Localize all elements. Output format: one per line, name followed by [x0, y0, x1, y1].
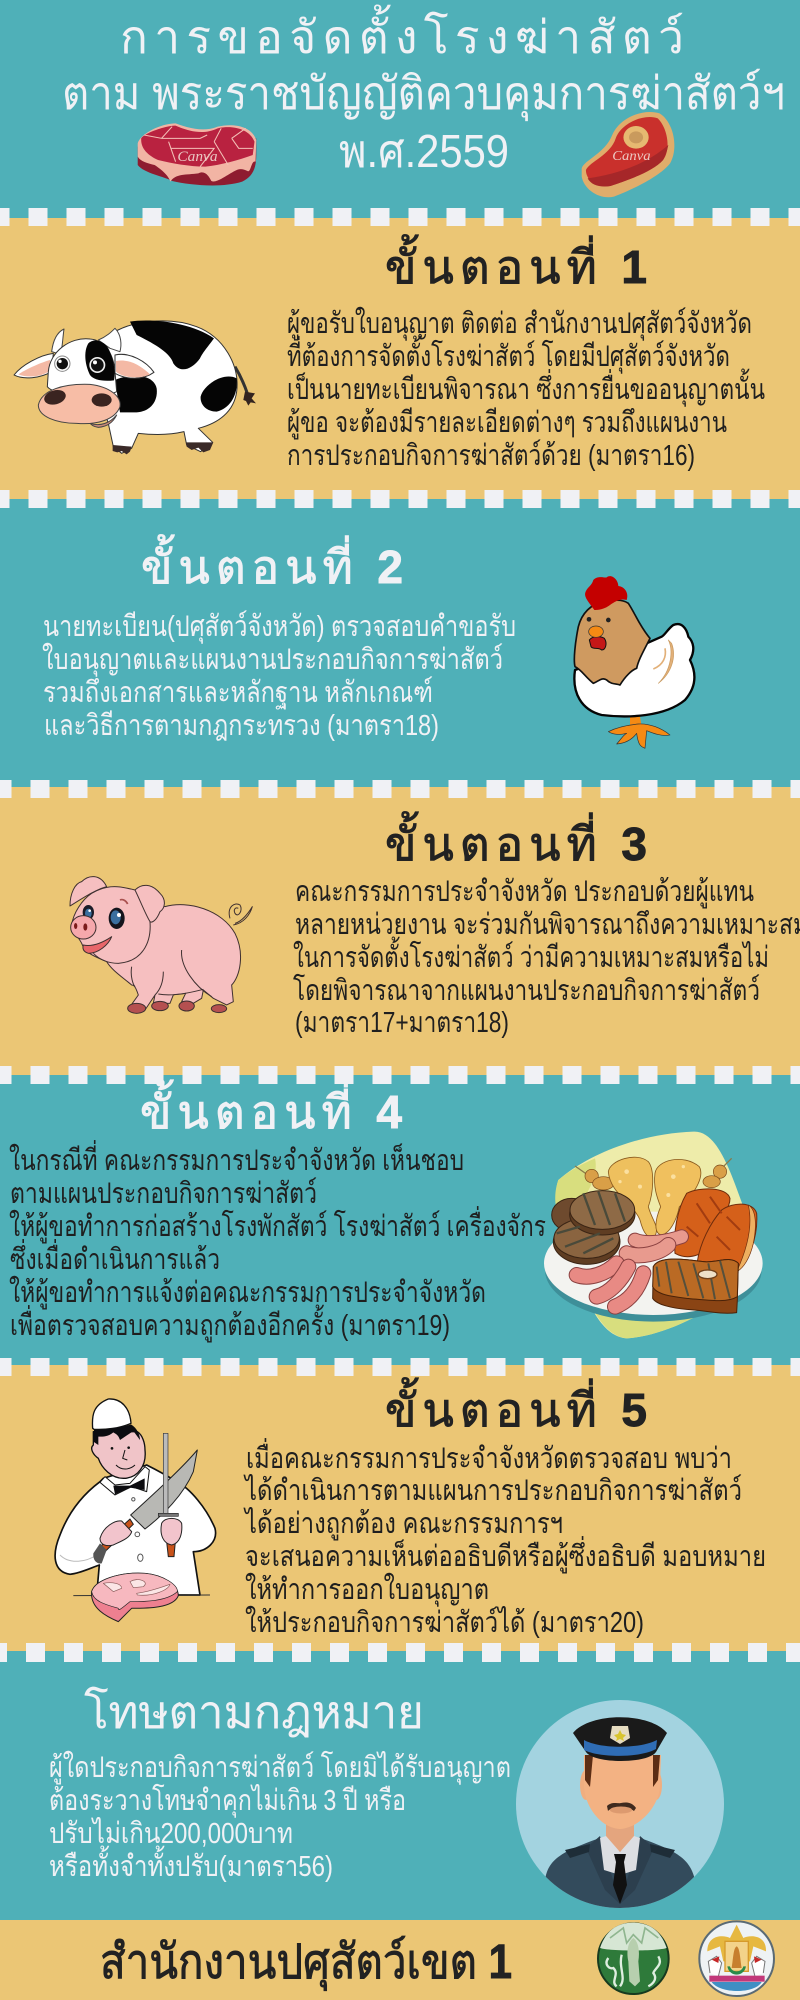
- footer title: สำนักงานปศุสัตว์เขต 1: [100, 1936, 512, 1991]
- step 2 text: [42, 610, 516, 742]
- icon: police officer: [516, 1700, 724, 1908]
- step 5 text: ให้ประกอบกิจการฆ่าสัตว์ได้ (มาตรา20): [245, 1605, 644, 1639]
- step 5 text: ได้อย่างถูกต้อง คณะกรรมการฯ: [243, 1506, 563, 1541]
- panel: step 2 background: [0, 499, 800, 787]
- step 3 text: [293, 876, 800, 1039]
- icon: butcher: [55, 1399, 216, 1622]
- penalty text: ปรับไม่เกิน200,000บาท: [49, 1816, 293, 1850]
- step 1 heading: ขั้นตอนที่ 1: [385, 234, 647, 293]
- step 2 text: ใบอนุญาตและแผนงานประกอบกิจการฆ่าสัตว์: [42, 642, 503, 677]
- penalty text: ผู้ใดประกอบกิจการฆ่าสัตว์ โดยมิได้รับอนุญาต: [49, 1750, 511, 1785]
- step 4 text: ให้ผู้ขอทำการก่อสร้างโรงพักสัตว์ โรงฆ่าสัตว์ เครื่องจักร: [9, 1206, 546, 1244]
- step 4 text: เพื่อตรวจสอบความถูกต้องอีกครั้ง (มาตรา19): [10, 1304, 450, 1343]
- penalty heading: โทษตามกฎหมาย: [84, 1686, 424, 1738]
- penalty text: [49, 1750, 511, 1883]
- step 2 text: นายทะเบียน(ปศุสัตว์จังหวัด) ตรวจสอบคำขอรับ: [43, 610, 516, 644]
- icon: grilled steak: [582, 112, 674, 197]
- step 1 text: การประกอบกิจการฆ่าสัตว์ด้วย (มาตรา16): [287, 439, 695, 472]
- icon: raw steak: [138, 123, 256, 185]
- step 1 text: [287, 306, 765, 472]
- logo: royal emblem: [699, 1921, 774, 1996]
- step 5 text: [243, 1438, 766, 1639]
- step 4 text: ตามแผนประกอบกิจการฆ่าสัตว์: [10, 1177, 317, 1210]
- panel: step 1 background: [0, 218, 800, 499]
- step 4 text: ในกรณีที่ คณะกรรมการประจำจังหวัด เห็นชอบ: [9, 1140, 464, 1177]
- icon: plate of grilled meat: [544, 1132, 763, 1338]
- step 4 text: ซึ่งเมื่อดำเนินการแล้ว: [10, 1239, 220, 1276]
- panel: title background: [0, 0, 800, 218]
- icon: chicken: [574, 576, 694, 748]
- step 5 text: ให้ทำการออกใบอนุญาต: [245, 1572, 489, 1607]
- logo: green emblem: [598, 1923, 669, 1994]
- panel: footer background: [0, 1920, 800, 2000]
- step 4 text: [9, 1140, 546, 1343]
- panel: step 5 background: [0, 1365, 800, 1651]
- panel: penalty background: [0, 1651, 800, 1920]
- penalty text: หรือทั้งจำทั้งปรับ(มาตรา56): [49, 1845, 333, 1883]
- step 5 heading: ขั้นตอนที่ 5: [385, 1377, 647, 1436]
- title: การขอจัดตั้งโรงฆ่าสัตว์: [120, 4, 684, 63]
- penalty text: ต้องระวางโทษจำคุกไม่เกิน 3 ปี หรือ: [49, 1783, 406, 1818]
- step 3 heading: ขั้นตอนที่ 3: [385, 811, 647, 870]
- icon: raw steak: Canva: [177, 149, 218, 165]
- icon: pig: [70, 877, 252, 1013]
- step 4 text: ให้ผู้ขอทำการแจ้งต่อคณะกรรมการประจำจังหวัด: [9, 1275, 486, 1310]
- icon: cow: [14, 321, 256, 454]
- icon: grilled steak: Canva: [612, 148, 651, 164]
- panel: step 4 background: [0, 1075, 800, 1365]
- title: [62, 4, 785, 177]
- panel: step 3 background: [0, 787, 800, 1075]
- step 4 heading: ขั้นตอนที่ 4: [140, 1079, 402, 1138]
- step 2 heading: ขั้นตอนที่ 2: [141, 534, 403, 593]
- step 3 text: (มาตรา17+มาตรา18): [295, 1007, 509, 1039]
- title: พ.ศ.2559: [339, 125, 509, 177]
- step 2 text: รวมถึงเอกสารและหลักฐาน หลักเกณฑ์: [43, 676, 433, 710]
- step 2 text: และวิธีการตามกฎกระทรวง (มาตรา18): [44, 710, 439, 742]
